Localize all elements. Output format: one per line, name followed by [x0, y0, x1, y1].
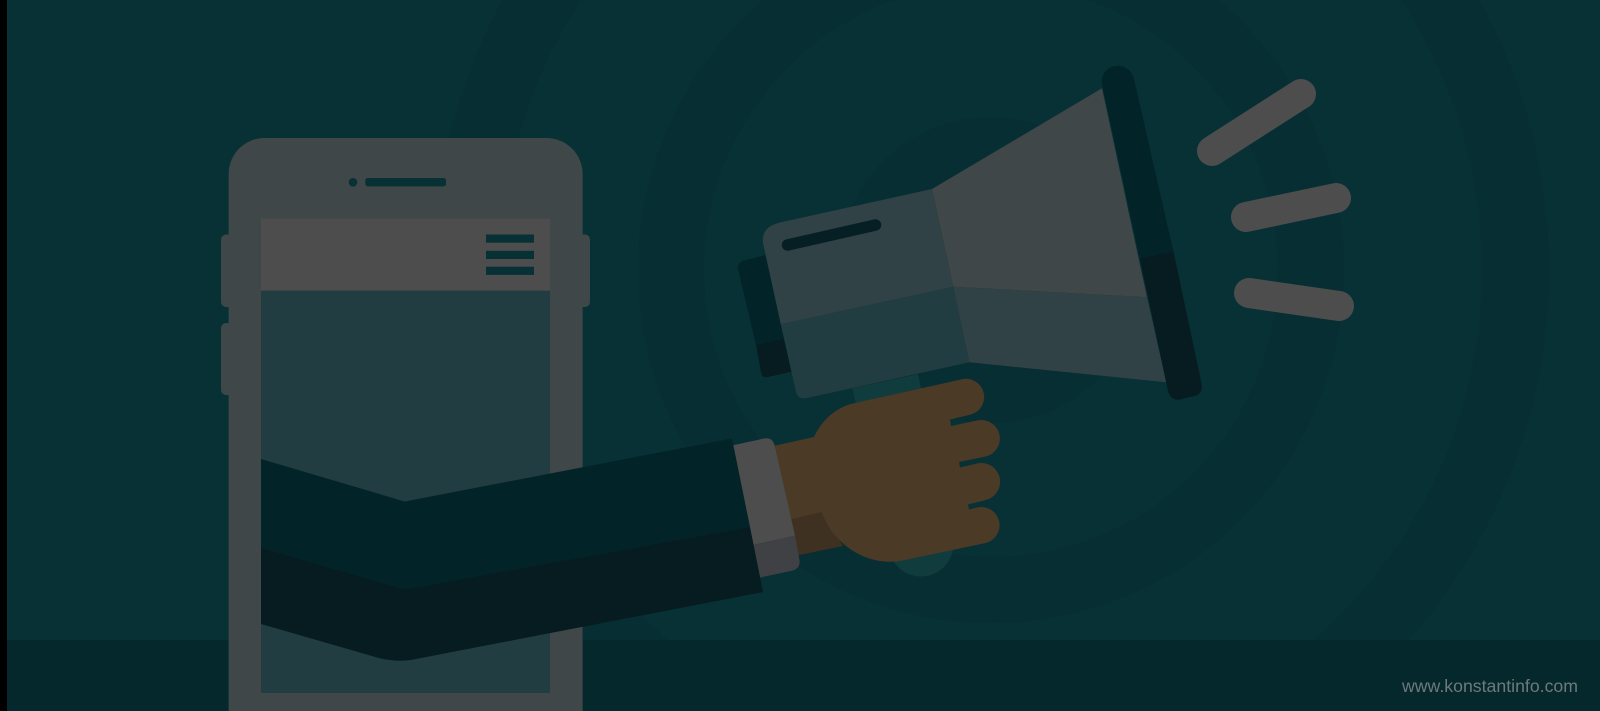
- megaphone: [738, 66, 1202, 400]
- sound rays: [1212, 94, 1339, 306]
- hamburger menu icon: [486, 234, 534, 275]
- megaphone rim lower: [1140, 252, 1202, 400]
- megaphone back cap: [738, 254, 792, 377]
- sleeve lower: [261, 527, 763, 661]
- cuff light: [733, 438, 795, 545]
- jacket sleeve: [261, 438, 763, 661]
- megaphone cone top: [932, 88, 1147, 297]
- cuff shadow: [753, 536, 800, 578]
- phone body: [229, 138, 583, 711]
- website credit: www.konstantinfo.com: [1401, 676, 1578, 696]
- left black edge strip: [0, 0, 7, 711]
- megaphone body top: [763, 189, 953, 324]
- shirt cuff: [733, 438, 800, 578]
- wrist: [760, 437, 840, 524]
- phone speaker: [365, 178, 446, 186]
- phone: [221, 138, 590, 711]
- fist: [814, 379, 1000, 562]
- phone screen: [261, 290, 550, 693]
- megaphone handle: [852, 374, 954, 576]
- app header bar: [261, 219, 550, 291]
- megaphone rim upper: [1102, 66, 1174, 258]
- phone side buttons: [221, 234, 590, 395]
- hand and wrist: [760, 379, 1000, 562]
- megaphone body bottom: [781, 287, 969, 398]
- megaphone cone bottom: [953, 287, 1166, 382]
- sleeve upper: [261, 438, 750, 590]
- phone camera dot: [349, 178, 357, 187]
- megaphone slot: [788, 225, 876, 245]
- wrist shadow: [770, 512, 843, 559]
- ground band: [7, 640, 1600, 711]
